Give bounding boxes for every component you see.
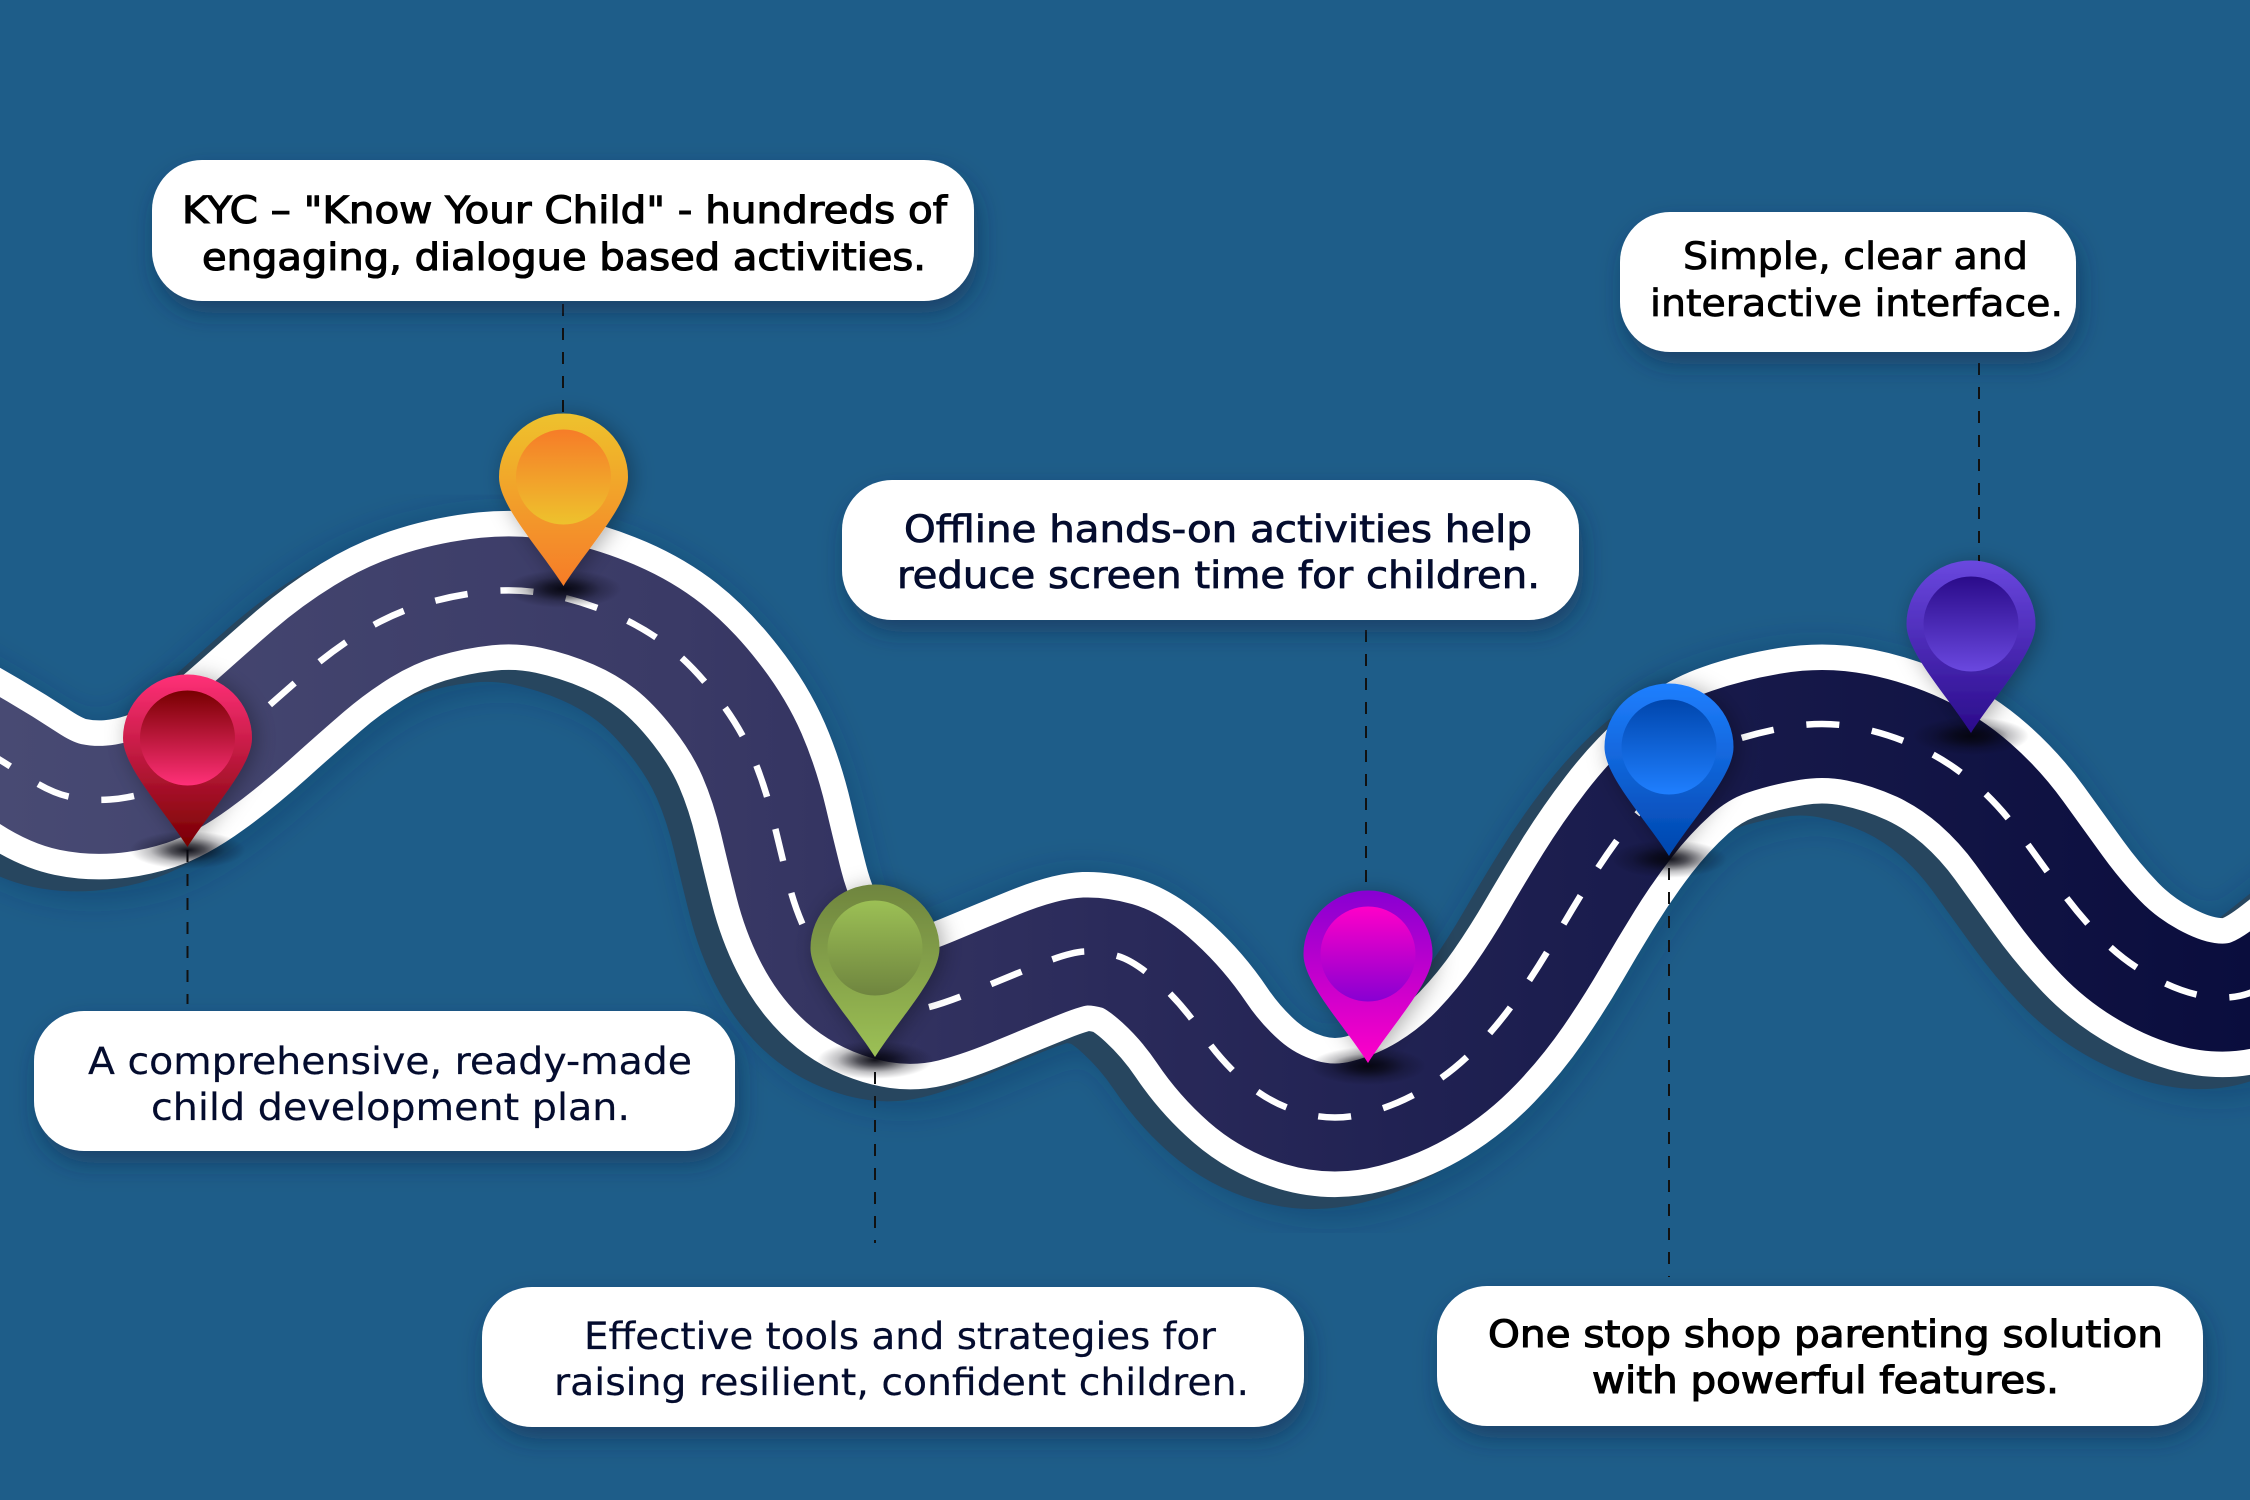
icon: blue map pin	[1604, 684, 1734, 878]
callout: one stop shop: One stop shop parenting solution	[1488, 1313, 2163, 1356]
callout: development plan: child development plan.	[151, 1086, 630, 1129]
callout: tools and strategies: raising resilient, confident children.	[554, 1361, 1249, 1404]
callout: simple interface: interactive interface.	[1650, 282, 2063, 325]
callout: one stop shop	[1437, 1286, 2203, 1426]
callout: development plan: A comprehensive, ready-made	[88, 1040, 692, 1083]
icon: red map pin	[123, 674, 252, 869]
callout: KYC activities	[152, 160, 974, 301]
road surface	[0, 590, 2250, 1118]
connector: magenta pin	[1365, 630, 1367, 895]
connector: purple pin	[1978, 363, 1980, 565]
callout: tools and strategies	[482, 1287, 1304, 1427]
winding road	[0, 590, 2250, 1130]
road centre dashes	[0, 590, 2250, 1118]
road cast shadow	[0, 602, 2250, 1130]
icon: green map pin	[810, 884, 940, 1079]
road soft glow shadow	[0, 600, 2250, 1128]
icon: magenta map pin	[1304, 890, 1432, 1085]
callout: KYC activities: engaging, dialogue based activities.	[202, 236, 926, 279]
connector: red pin	[186, 850, 188, 1004]
callout: offline activities: reduce screen time for children.	[897, 554, 1540, 597]
road white border	[0, 590, 2250, 1118]
connector: yellow pin	[562, 304, 564, 420]
icon: purple map pin	[1906, 560, 2036, 755]
callout: one stop shop: with powerful features.	[1592, 1359, 2059, 1402]
callout: KYC activities: KYC – "Know Your Child" - hundreds of	[182, 189, 948, 232]
callout: offline activities	[842, 480, 1579, 620]
connector: green pin	[874, 1072, 876, 1243]
callout: simple interface: Simple, clear and	[1683, 235, 2028, 278]
icon: yellow map pin	[499, 414, 628, 608]
callout: offline activities: Offline hands-on activities help	[904, 508, 1532, 551]
dashed connector lines	[188, 304, 1979, 1277]
callout: simple interface	[1620, 212, 2076, 352]
connector: blue pin	[1668, 868, 1670, 1277]
callout: tools and strategies: Effective tools and strategies for	[584, 1315, 1217, 1358]
callout: development plan	[34, 1011, 735, 1151]
